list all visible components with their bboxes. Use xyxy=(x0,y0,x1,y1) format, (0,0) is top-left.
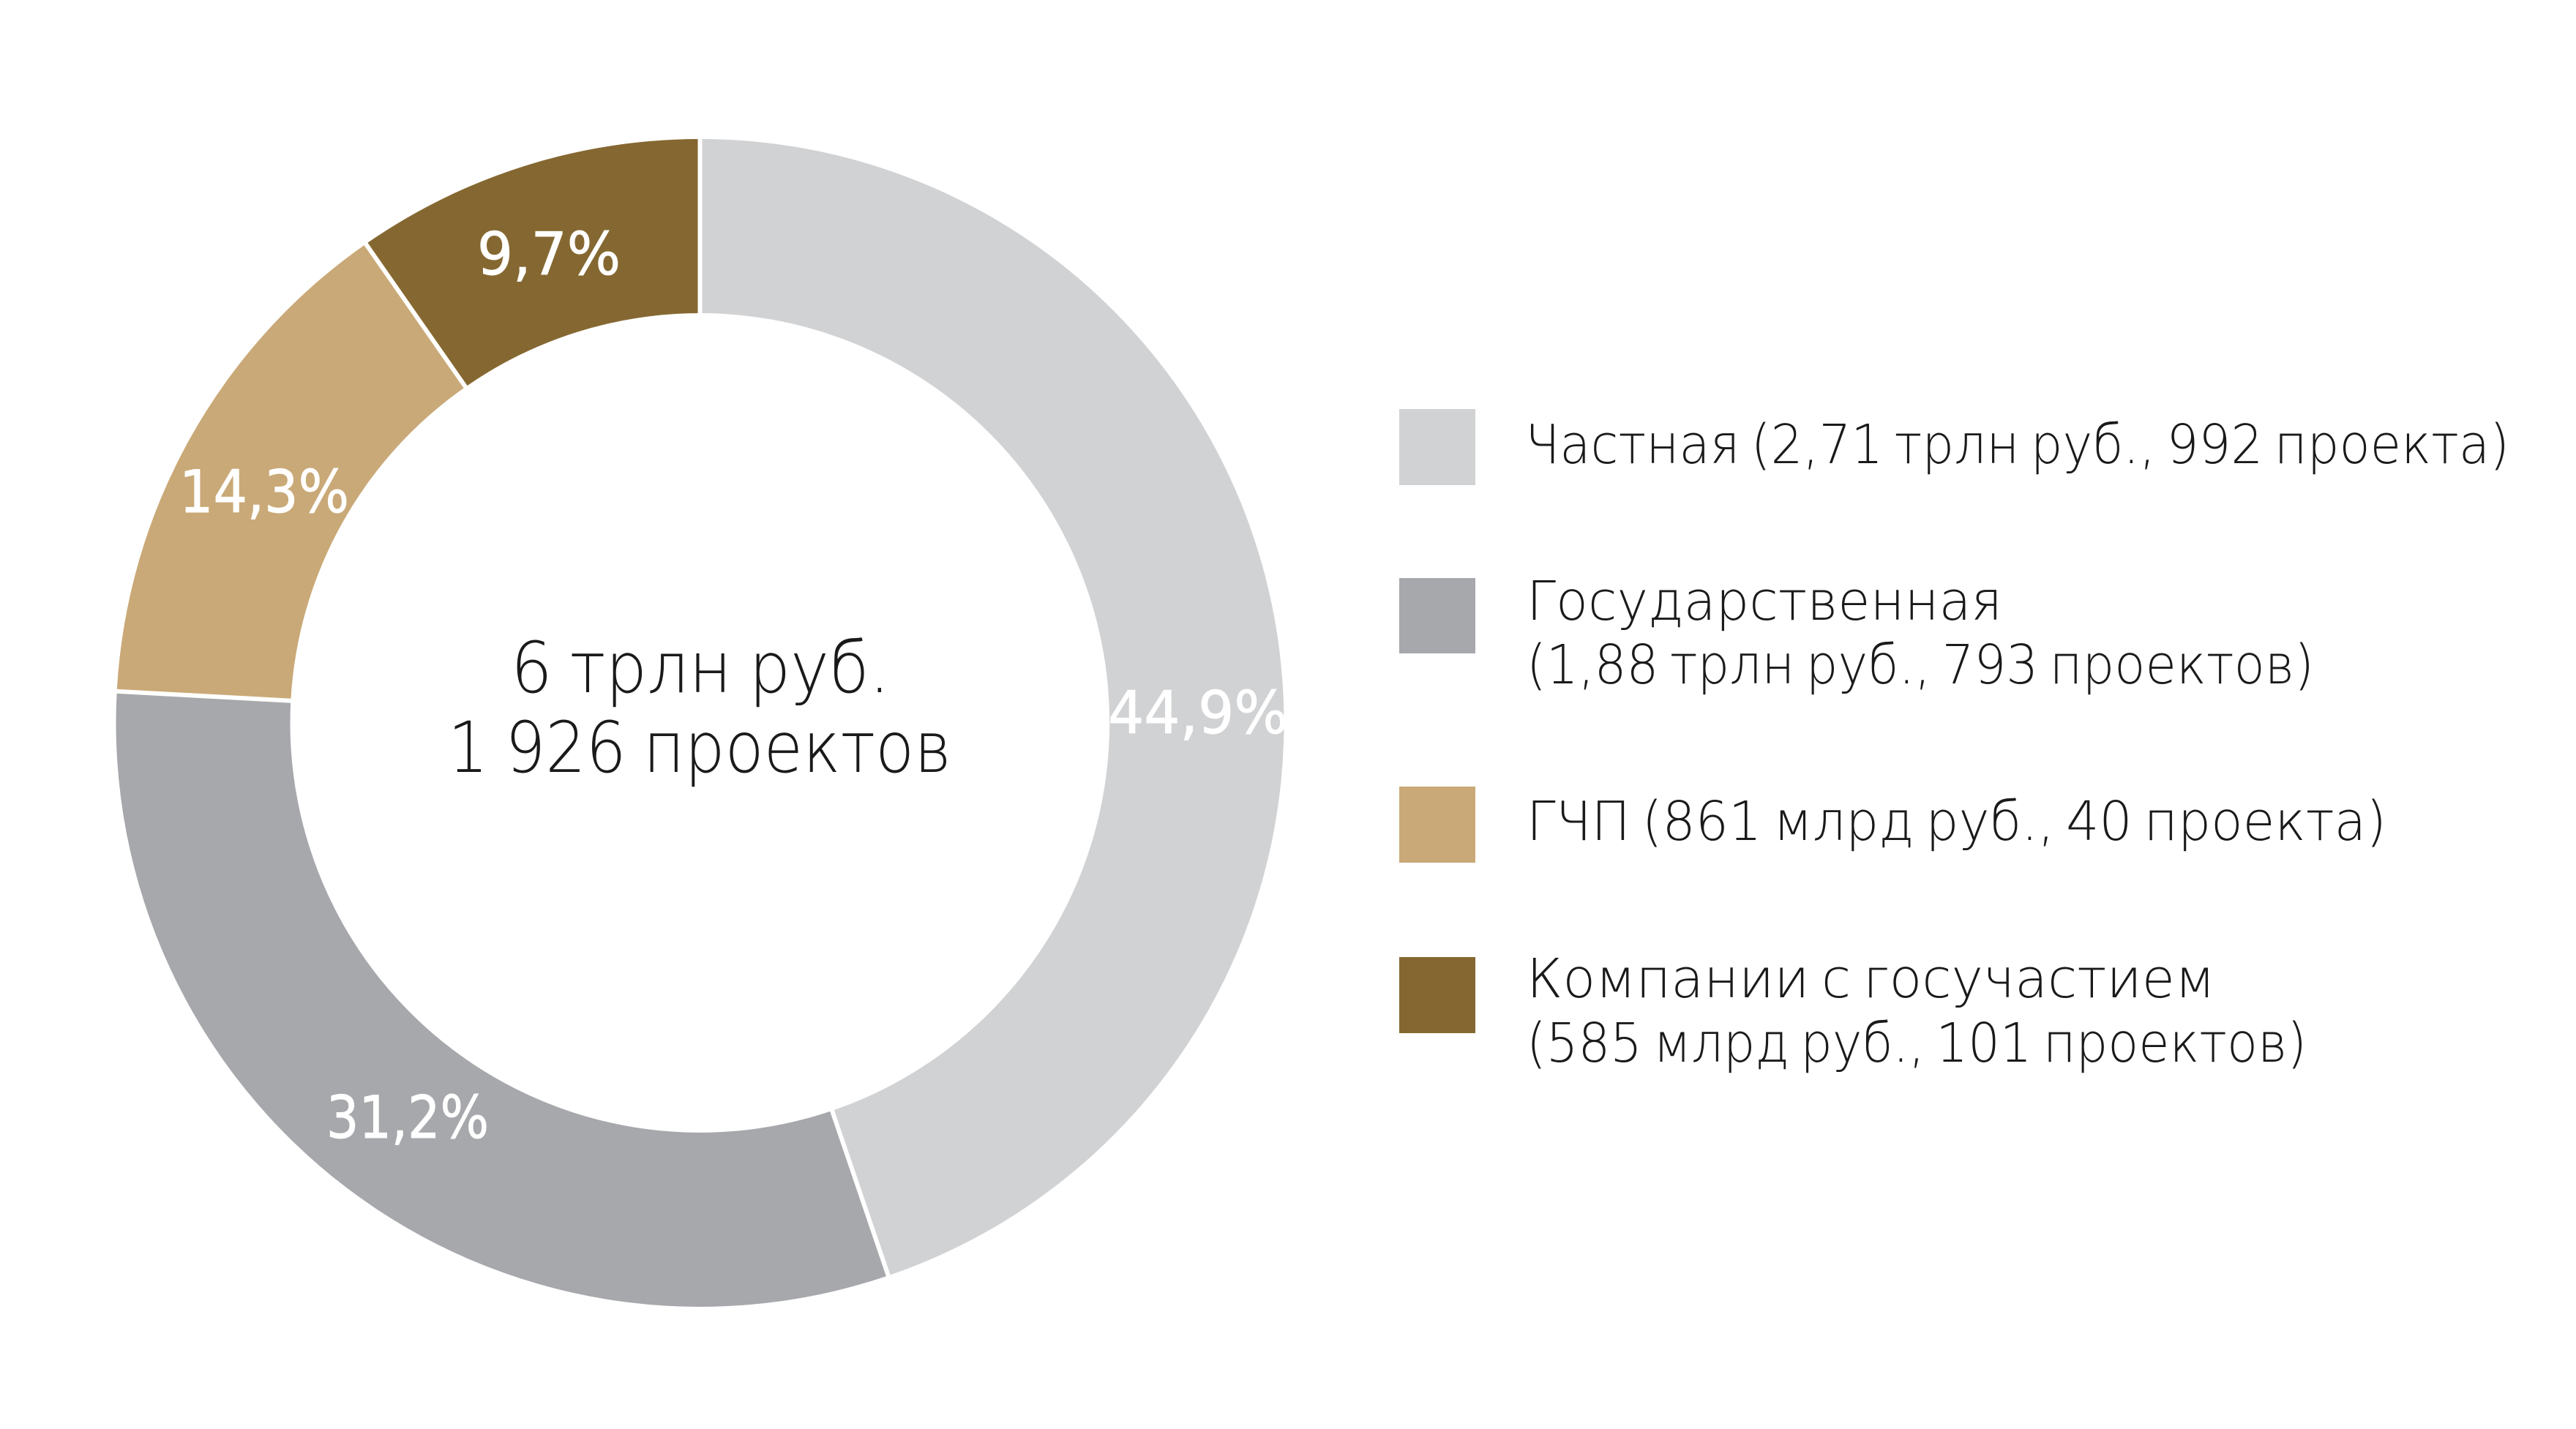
percentage label 14,3%: 14,3% xyxy=(179,458,349,526)
legend item: state companies: (585 млрд руб., 101 проектов) xyxy=(1527,1012,2307,1075)
segment: state 31.2% xyxy=(116,691,888,1307)
segment: private 44.9% xyxy=(700,139,1284,1275)
legend item: state companies xyxy=(1399,948,2307,1075)
legend item: state: (1,88 трлн руб., 793 проектов) xyxy=(1527,634,2314,697)
legend item: state xyxy=(1399,570,2314,697)
legend item: private xyxy=(1399,409,2509,485)
legend xyxy=(1399,409,2509,1075)
percentage label 9,7%: 9,7% xyxy=(477,220,621,288)
donut chart xyxy=(114,136,1284,1307)
legend item: state: Государственная xyxy=(1527,570,2002,633)
center total: 1 926 проектов xyxy=(448,707,951,789)
center total: 6 трлн руб. xyxy=(511,627,890,709)
legend item: PPP: ГЧП (861 млрд руб., 40 проекта) xyxy=(1527,790,2386,853)
percentage label 44,9%: 44,9% xyxy=(1108,679,1288,747)
legend item: state companies: Компании с госучастием xyxy=(1527,948,2215,1010)
segment: PPP 14.3% xyxy=(117,244,465,701)
segment: state companies 9.7% xyxy=(366,139,700,387)
legend item: PPP xyxy=(1399,787,2386,863)
legend item: private: Частная (2,71 трлн руб., 992 проекта) xyxy=(1525,413,2509,476)
center total xyxy=(448,627,951,789)
percentage label 31,2%: 31,2% xyxy=(326,1084,489,1152)
